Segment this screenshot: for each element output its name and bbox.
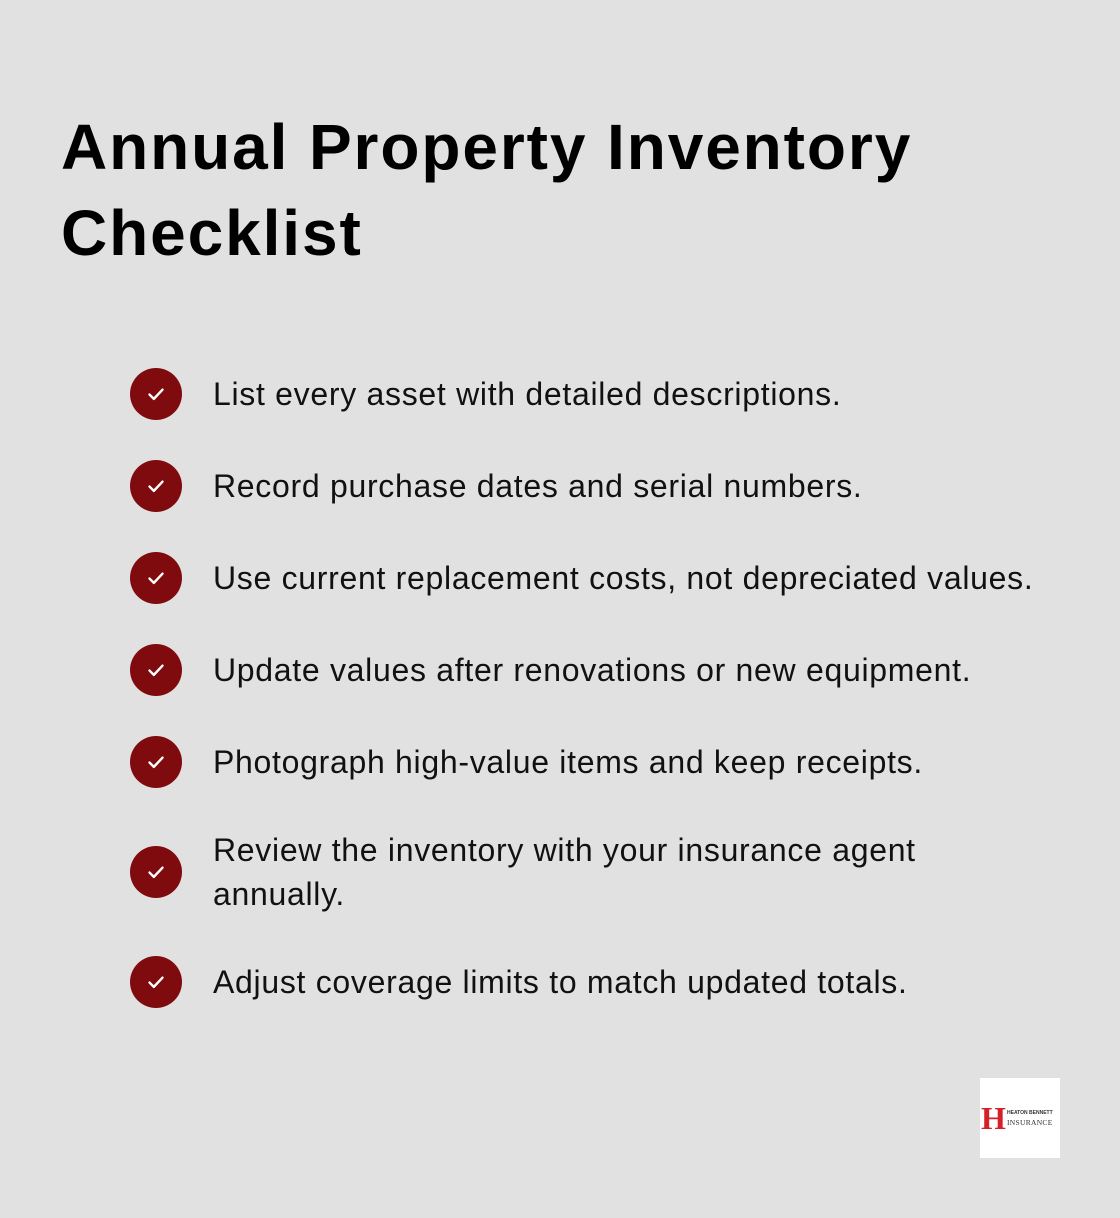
title: Checklist xyxy=(61,197,363,269)
item 7 xyxy=(130,956,908,1008)
item 2: Record purchase dates and serial numbers. xyxy=(213,468,862,504)
item 6: annually. xyxy=(213,876,345,912)
item 7: Adjust coverage limits to match updated totals. xyxy=(213,964,908,1000)
item 6: Review the inventory with your insurance agent xyxy=(213,832,916,868)
item 2 xyxy=(130,460,862,512)
item 1 xyxy=(130,368,841,420)
item 3 xyxy=(130,552,1033,604)
title: Annual Property Inventory xyxy=(61,111,912,183)
item 6 xyxy=(130,832,916,912)
item 5: Photograph high-value items and keep receipts. xyxy=(213,744,923,780)
logo: HEATON BENNETT xyxy=(1007,1110,1053,1116)
item 1: List every asset with detailed descriptions. xyxy=(213,376,841,412)
item 5 xyxy=(130,736,923,788)
item 4 xyxy=(130,644,971,696)
title xyxy=(61,111,912,269)
item 4: Update values after renovations or new equipment. xyxy=(213,652,971,688)
item 3: Use current replacement costs, not depreciated values. xyxy=(213,560,1033,596)
logo: INSURANCE xyxy=(1007,1118,1053,1127)
logo xyxy=(980,1078,1060,1158)
logo: H xyxy=(981,1100,1006,1136)
